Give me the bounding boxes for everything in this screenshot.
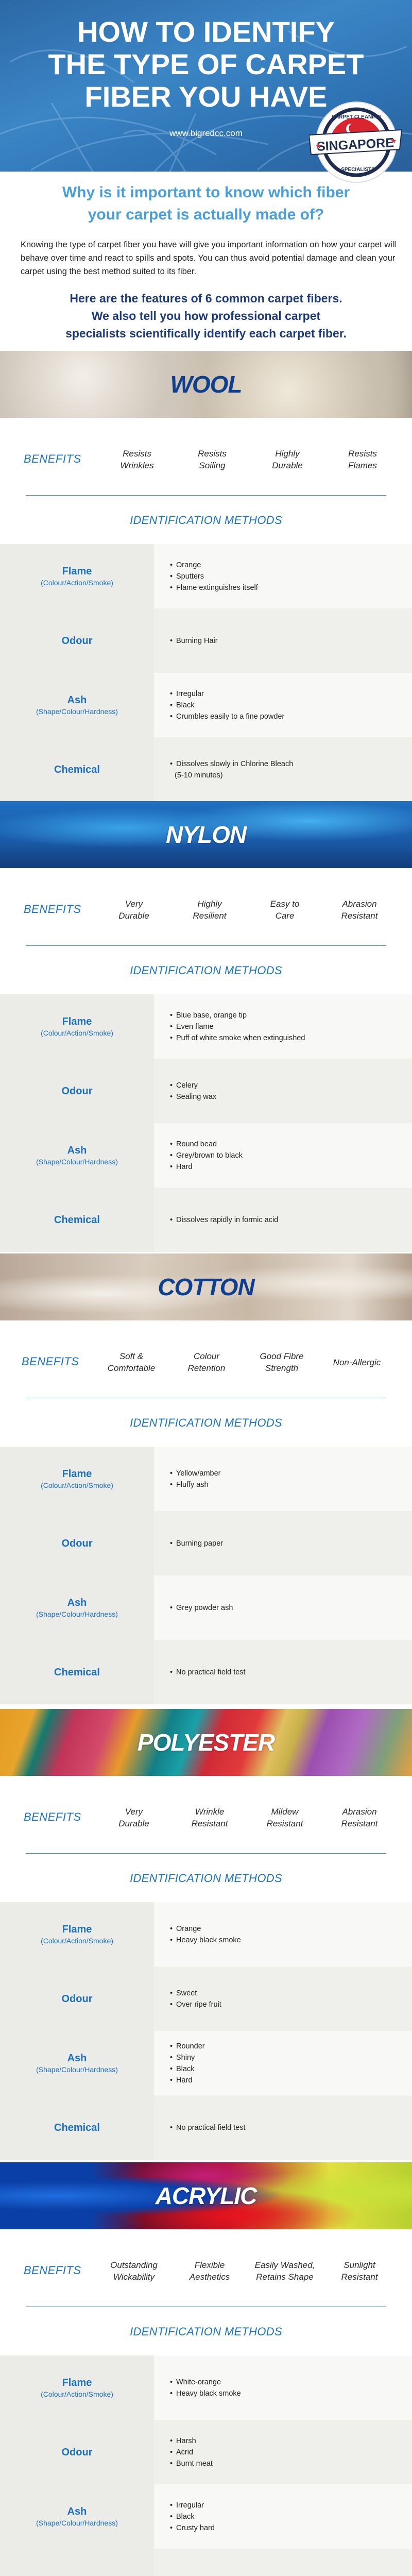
identification heading: IDENTIFICATION METHODS — [130, 514, 282, 527]
identification table: (Colour/Action/Smoke) — [41, 2389, 113, 2398]
identification table: Ash — [67, 1145, 87, 1156]
benefits row: Resistant — [341, 1819, 377, 1828]
identification table: (Colour/Action/Smoke) — [41, 578, 113, 586]
benefits row: Wrinkles — [120, 461, 154, 470]
identification table: Round bead — [176, 1140, 217, 1148]
badge: carpet cleaning specialists singapore: CARPET CLEANING — [332, 114, 381, 120]
identification table: Burning Hair — [176, 637, 218, 645]
features heading: Here are the features of 6 common carpet fibers. — [70, 292, 342, 305]
benefits row — [24, 1807, 378, 1828]
benefits row: Resistant — [192, 1819, 228, 1828]
identification heading: IDENTIFICATION METHODS — [130, 964, 282, 977]
website url: www.bigredcc.com — [169, 128, 243, 138]
identification table: Hard — [176, 1162, 192, 1171]
identification table: Black — [176, 2512, 194, 2520]
identification table — [0, 1902, 412, 2160]
identification table: Dissolves slowly in Chlorine Bleach — [176, 759, 293, 768]
identification table: Ash — [67, 2053, 87, 2064]
identification table: Ash — [67, 1597, 87, 1608]
features heading: specialists scientifically identify each carpet fiber. — [65, 327, 347, 340]
identification table: (5-10 minutes) — [175, 771, 223, 779]
identification table: Odour — [62, 1085, 93, 1096]
identification table: Flame — [62, 566, 92, 577]
banner: polyester: POLYESTER — [138, 1729, 274, 1756]
identification table: Over ripe fruit — [176, 2000, 221, 2008]
identification table: Odour — [62, 2446, 93, 2458]
identification table: Orange — [176, 1925, 201, 1933]
benefits row: Very — [125, 1807, 143, 1817]
identification table: Ash — [67, 2506, 87, 2517]
benefits row: Abrasion — [342, 1807, 377, 1817]
benefits row: Outstanding — [110, 2260, 158, 2270]
banner: wool — [0, 351, 412, 418]
benefits row: BENEFITS — [24, 1810, 81, 1823]
badge: carpet cleaning specialists singapore: SINGAPORE — [316, 135, 394, 154]
identification table: Odour — [62, 1993, 93, 2004]
section: nylon — [0, 801, 412, 1252]
badge: carpet cleaning specialists singapore: SPECIALISTS — [341, 167, 375, 173]
benefits row: Aesthetics — [190, 2272, 230, 2282]
question heading — [62, 184, 350, 223]
identification heading: IDENTIFICATION METHODS — [130, 2325, 282, 2338]
identification table: Shiny — [176, 2054, 195, 2062]
identification table: No practical field test — [176, 1668, 246, 1676]
identification table — [0, 544, 412, 801]
benefits row: Durable — [272, 461, 303, 470]
identification table: (Shape/Colour/Hardness) — [36, 707, 118, 715]
identification table: Black — [176, 2065, 194, 2073]
identification table: Puff of white smoke when extinguished — [176, 1033, 305, 1042]
benefits row: BENEFITS — [24, 903, 81, 916]
badge: carpet cleaning specialists singapore — [309, 101, 402, 183]
identification table: Grey/brown to black — [176, 1151, 243, 1159]
badge: carpet cleaning specialists singapore: ★ — [390, 137, 397, 145]
hero header — [0, 0, 412, 172]
identification table: Blue base, orange tip — [176, 1011, 247, 1019]
identification table: Ash — [67, 694, 87, 706]
identification table: Flame — [62, 1016, 92, 1027]
benefits row: Resistant — [341, 911, 377, 921]
banner: nylon: NYLON — [166, 821, 246, 848]
identification table: Chemical — [54, 764, 100, 775]
identification table: Chemical — [54, 1666, 100, 1677]
identification table: (Colour/Action/Smoke) — [41, 1936, 113, 1944]
identification table: Chemical — [54, 2122, 100, 2133]
identification table — [0, 1447, 412, 1704]
identification table: Fluffy ash — [176, 1481, 209, 1489]
benefits row — [24, 899, 378, 921]
identification table: Flame extinguishes itself — [176, 583, 258, 591]
identification table: Grey powder ash — [176, 1603, 233, 1612]
identification table: Flame — [62, 1924, 92, 1935]
identification table: Acrid — [176, 2448, 193, 2456]
benefits row: Resists — [198, 449, 227, 459]
benefits row: Non-Allergic — [333, 1358, 381, 1367]
identification table: White-orange — [176, 2378, 221, 2386]
identification table: Burning paper — [176, 1539, 223, 1548]
title: THE TYPE OF CARPET — [48, 48, 364, 80]
identification table: Harsh — [176, 2437, 196, 2445]
benefits row: Easy to — [270, 899, 299, 909]
benefits row: BENEFITS — [24, 452, 81, 465]
benefits row: BENEFITS — [24, 2264, 81, 2277]
banner: nylon — [0, 801, 412, 868]
benefits row: Highly — [275, 449, 300, 459]
benefits row: Resilient — [193, 911, 227, 921]
benefits row: Very — [125, 899, 143, 909]
identification table: (Shape/Colour/Hardness) — [36, 2518, 118, 2527]
identification table: Celery — [176, 1081, 198, 1089]
intro paragraph: Knowing the type of carpet fiber you have will give you important information on how your carpet will behave over time and react to spills and spots. You can thus avoid potential damage and clean your carpet using the best method suited to its fiber. — [21, 240, 396, 276]
identification table: Rounder — [176, 2042, 205, 2050]
benefits row: Sunlight — [344, 2260, 375, 2270]
benefits row: Durable — [118, 1819, 149, 1828]
title — [48, 15, 364, 113]
section: polyester — [0, 1709, 412, 2160]
identification table: (Shape/Colour/Hardness) — [36, 1157, 118, 1165]
benefits row: BENEFITS — [22, 1355, 79, 1368]
benefits row: Abrasion — [342, 899, 377, 909]
benefits row: Resistant — [341, 2272, 377, 2282]
identification table — [0, 2355, 412, 2576]
banner: cotton — [0, 1253, 412, 1320]
identification table: Heavy black smoke — [176, 2389, 241, 2398]
identification table: Yellow/amber — [176, 1469, 221, 1478]
identification table: Even flame — [176, 1022, 214, 1030]
benefits row: Retains Shape — [256, 2272, 314, 2282]
banner: wool: WOOL — [170, 371, 242, 398]
title: HOW TO IDENTIFY — [77, 15, 335, 48]
benefits row: Flames — [348, 461, 377, 470]
identification heading: IDENTIFICATION METHODS — [130, 1872, 282, 1885]
identification table: Sealing wax — [176, 1092, 216, 1100]
identification table — [0, 994, 412, 1252]
benefits row: Wrinkle — [195, 1807, 224, 1817]
banner: acrylic: ACRYLIC — [156, 2182, 256, 2209]
benefits row: Good Fibre — [260, 1351, 304, 1361]
benefits row: Highly — [197, 899, 222, 909]
benefits row — [24, 449, 377, 470]
benefits row: Retention — [188, 1363, 225, 1373]
identification table: Sweet — [176, 1989, 197, 1997]
section: wool — [0, 351, 412, 801]
identification table: No practical field test — [176, 2124, 246, 2132]
benefits row — [24, 2260, 378, 2282]
question heading: your carpet is actually made of? — [88, 206, 324, 223]
identification table: Flame — [62, 1468, 92, 1480]
benefits row: Strength — [265, 1363, 298, 1373]
banner: cotton: COTTON — [158, 1274, 254, 1300]
benefits row: Mildew — [271, 1807, 298, 1817]
identification table: Irregular — [176, 689, 204, 698]
section: cotton — [0, 1253, 412, 1704]
benefits row — [22, 1351, 381, 1373]
features heading — [65, 292, 347, 340]
title: FIBER YOU HAVE — [85, 80, 327, 113]
section: acrylic — [0, 2162, 412, 2576]
identification table: (Shape/Colour/Hardness) — [36, 1609, 118, 1618]
identification table: Sputters — [176, 572, 204, 580]
benefits row: Care — [276, 911, 294, 921]
identification table: (Shape/Colour/Hardness) — [36, 2065, 118, 2073]
benefits row: Soft & — [119, 1351, 143, 1361]
benefits row: Durable — [118, 911, 149, 921]
identification heading: IDENTIFICATION METHODS — [130, 1416, 282, 1429]
benefits row: Resistant — [267, 1819, 303, 1828]
identification table: Dissolves rapidly in formic acid — [176, 1216, 278, 1224]
identification table: Burnt meat — [176, 2460, 213, 2468]
benefits row: Resists — [123, 449, 151, 459]
identification table: Orange — [176, 561, 201, 569]
benefits row: Flexible — [195, 2260, 225, 2270]
banner: acrylic — [0, 2162, 412, 2229]
identification table: Chemical — [54, 1214, 100, 1225]
benefits row: Wickability — [113, 2272, 154, 2282]
identification table: (Colour/Action/Smoke) — [41, 1481, 113, 1489]
benefits row: Easily Washed, — [255, 2260, 315, 2270]
identification table: Hard — [176, 2076, 192, 2084]
benefits row: Soiling — [199, 461, 226, 470]
identification table: Heavy black smoke — [176, 1936, 241, 1944]
identification table: Flame — [62, 2377, 92, 2388]
benefits row: Comfortable — [108, 1363, 155, 1373]
benefits row: Colour — [194, 1351, 219, 1361]
banner: polyester — [0, 1709, 412, 1776]
features heading: We also tell you how professional carpet — [92, 309, 320, 323]
benefits row: Resists — [348, 449, 377, 459]
identification table: Irregular — [176, 2501, 204, 2509]
identification table: (Colour/Action/Smoke) — [41, 1028, 113, 1037]
identification table: Crusty hard — [176, 2523, 215, 2532]
identification table: Odour — [62, 635, 93, 646]
badge: carpet cleaning specialists singapore: ★ — [315, 142, 322, 150]
identification table: Crumbles easily to a fine powder — [176, 712, 284, 720]
identification table: Black — [176, 701, 194, 709]
question heading: Why is it important to know which fiber — [62, 184, 350, 201]
identification table: Odour — [62, 1537, 93, 1549]
